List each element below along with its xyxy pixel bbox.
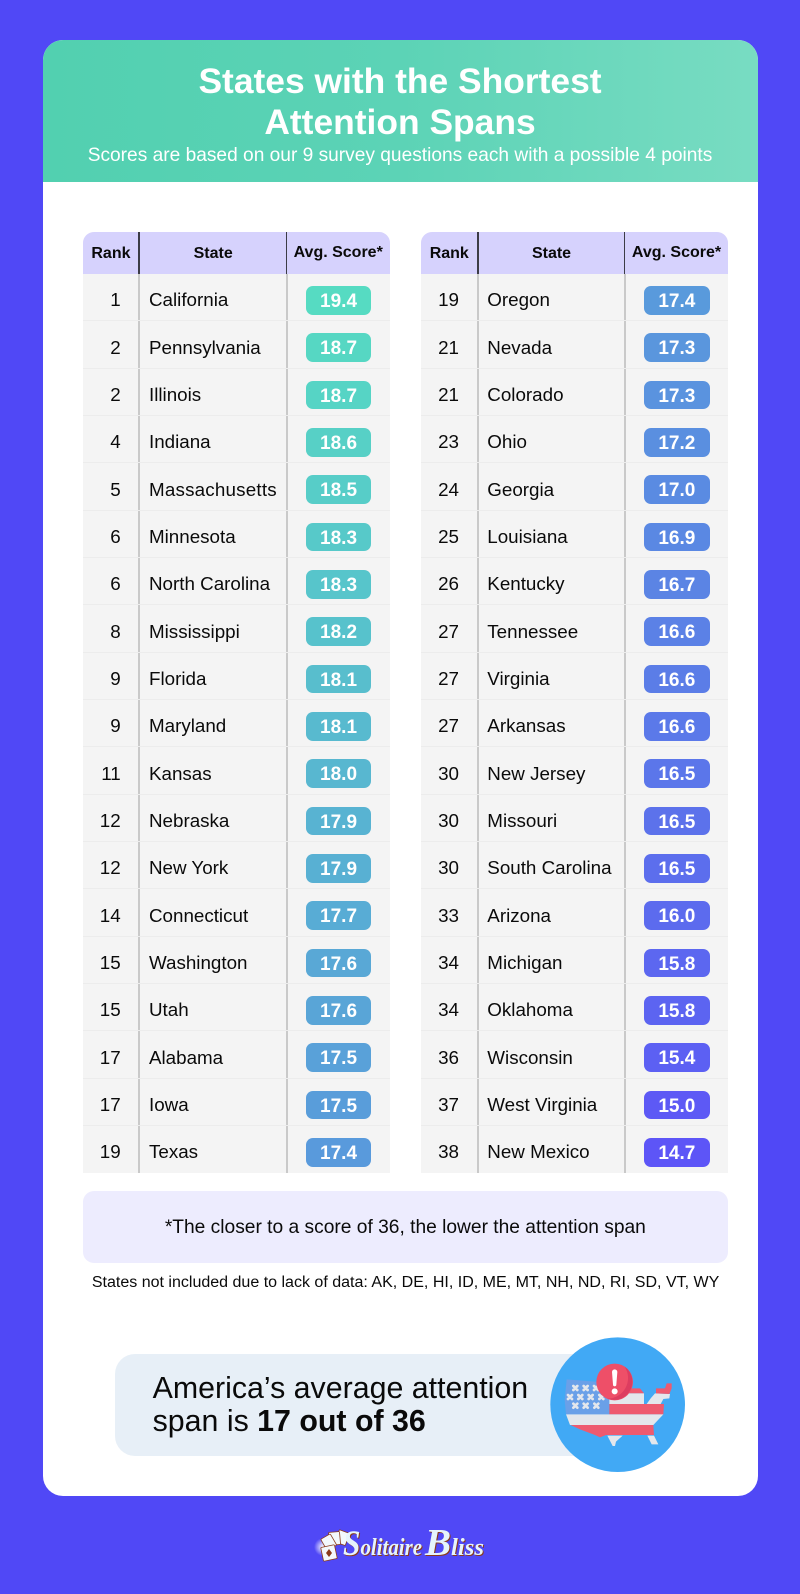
row: Virginia: [421, 653, 728, 700]
row: Kentucky: Kentucky: [487, 573, 565, 594]
logo: Solitaire Bliss: Solitaire: [343, 1523, 422, 1563]
row: Arkansas: [421, 700, 728, 747]
row: Oregon: [421, 274, 728, 321]
logo: Solitaire Bliss: Bliss: [425, 1523, 485, 1565]
row: Kentucky: [421, 558, 728, 605]
row: Wisconsin: [421, 1031, 728, 1079]
row: Nevada: Nevada: [487, 337, 552, 358]
row: Washington: 15: [100, 952, 121, 973]
row: Georgia: 24: [438, 479, 459, 500]
score note callout: [83, 1191, 728, 1263]
row: Connecticut: [83, 889, 390, 937]
row: Illinois: 2: [110, 384, 121, 405]
row: Minnesota: 18.3: [320, 528, 357, 549]
row: Tennessee: 16.6: [658, 622, 695, 643]
title line 1: States with the Shortest: [198, 61, 602, 101]
row: Nevada: 17.3: [658, 338, 695, 359]
row: Texas: 19: [100, 1141, 121, 1162]
row: North Carolina: North Carolina: [149, 573, 270, 594]
header banner: [42, 40, 758, 182]
row: Virginia: 27: [438, 668, 459, 689]
row: Oregon: 19: [438, 289, 459, 310]
row: Arkansas: 16.6: [658, 717, 695, 738]
row: Washington: [83, 937, 390, 984]
row: Louisiana: [421, 511, 728, 558]
row: New Mexico: [438, 1138, 710, 1167]
row: Nebraska: [83, 795, 390, 842]
row: Missouri: [421, 795, 728, 842]
row: Arkansas: Arkansas: [487, 715, 566, 736]
row: Georgia: [421, 463, 728, 511]
row: New Jersey: 16.5: [658, 764, 695, 785]
row: Mississippi: 8: [110, 621, 121, 642]
row: Pennsylvania: 18.7: [320, 338, 357, 359]
row: Virginia: 16.6: [658, 670, 695, 691]
row: Utah: 15: [100, 999, 121, 1020]
row: Texas: [100, 1138, 371, 1167]
row: Iowa: 17: [100, 1094, 121, 1115]
row: New Mexico: 14.7: [658, 1143, 695, 1164]
logo: Solitaire Bliss: Solitaire: [344, 1524, 423, 1564]
row: Maryland: Maryland: [149, 715, 226, 736]
row: Colorado: [421, 369, 728, 416]
row: New Jersey: [421, 747, 728, 795]
row: Nebraska: Nebraska: [149, 810, 229, 831]
row: Texas: 17.4: [320, 1143, 357, 1164]
row: New York: 17.9: [320, 859, 357, 880]
row: Minnesota: 6: [110, 526, 121, 547]
row: Nebraska: 12: [100, 810, 121, 831]
table: ranks 19 to 38: [421, 232, 728, 1173]
row: Florida: 9: [110, 668, 121, 689]
row: Wisconsin: Wisconsin: [487, 1047, 573, 1068]
row: Kansas: Kansas: [149, 763, 212, 784]
logo: Solitaire Bliss: Bliss: [424, 1522, 484, 1564]
row: Arizona: Arizona: [487, 905, 551, 926]
row: West Virginia: 15.0: [658, 1096, 695, 1117]
row: New Jersey: New Jersey: [487, 763, 585, 784]
row: New York: 12: [100, 857, 121, 878]
row: Minnesota: [83, 511, 390, 558]
row: North Carolina: 18.3: [320, 575, 357, 596]
excluded states footnote: States not included due to lack of data: AK, DE, HI, ID, ME, MT, NH, ND, RI, SD, VT, WY: [92, 1273, 719, 1291]
row: Louisiana: 16.9: [658, 528, 695, 549]
table header: State: [532, 245, 571, 262]
national average callout: [115, 1354, 635, 1456]
row: Florida: 18.1: [320, 670, 357, 691]
row: New York: New York: [149, 857, 228, 878]
row: Louisiana: 25: [438, 526, 459, 547]
row: Washington: Washington: [149, 952, 247, 973]
row: Connecticut: 14: [100, 905, 121, 926]
row: Pennsylvania: Pennsylvania: [149, 337, 261, 358]
row: Tennessee: [421, 605, 728, 653]
row: Kansas: 11: [101, 763, 121, 784]
row: Indiana: 18.6: [320, 433, 357, 454]
table header: [83, 232, 390, 274]
row: Iowa: Iowa: [149, 1094, 189, 1115]
row: Nebraska: 17.9: [320, 812, 357, 833]
row: West Virginia: [421, 1079, 728, 1126]
row: Louisiana: Louisiana: [487, 526, 568, 547]
row: Missouri: 30: [438, 810, 459, 831]
row: New Jersey: 30: [438, 763, 459, 784]
row: Indiana: Indiana: [149, 431, 211, 452]
row: Virginia: Virginia: [487, 668, 550, 689]
row: Massachusetts: [83, 463, 390, 511]
table header: [421, 232, 728, 274]
row: Indiana: [83, 416, 390, 463]
row: Wisconsin: 36: [438, 1047, 459, 1068]
row: Washington: 17.6: [320, 954, 357, 975]
row: Kentucky: 16.7: [658, 575, 695, 596]
row: Florida: [83, 653, 390, 700]
row: Arkansas: 27: [438, 715, 459, 736]
row: Michigan: Michigan: [487, 952, 562, 973]
row: Mississippi: 18.2: [320, 622, 357, 643]
row: Massachusetts: 5: [110, 479, 121, 500]
row: West Virginia: West Virginia: [487, 1094, 597, 1115]
row: North Carolina: [83, 558, 390, 605]
row: Georgia: Georgia: [487, 479, 554, 500]
table header: State: [194, 245, 233, 262]
row: Illinois: [83, 369, 390, 416]
row: Massachusetts: Massachusetts: [149, 479, 277, 500]
icon: US flag map with alert: [550, 1337, 685, 1472]
row: Mississippi: [83, 605, 390, 653]
row: Minnesota: Minnesota: [149, 526, 236, 547]
row: South Carolina: 16.5: [658, 859, 695, 880]
row: Pennsylvania: [83, 321, 390, 369]
callout line 1: America’s average attention: [153, 1372, 528, 1405]
row: Indiana: 4: [110, 431, 121, 452]
row: Ohio: [421, 416, 728, 463]
table header: Rank: [91, 245, 130, 262]
table header: Rank: [430, 245, 469, 262]
row: Florida: Florida: [149, 668, 206, 689]
row: South Carolina: 30: [438, 857, 459, 878]
row: Alabama: [83, 1031, 390, 1079]
row: California: 19.4: [320, 291, 357, 312]
row: Iowa: [83, 1079, 390, 1126]
row: Kansas: 18.0: [320, 764, 357, 785]
row: Oklahoma: 34: [438, 999, 459, 1020]
row: Maryland: 9: [110, 715, 121, 736]
row: South Carolina: South Carolina: [487, 857, 612, 878]
row: Arizona: 33: [438, 905, 459, 926]
row: Arizona: 16.0: [658, 906, 695, 927]
score note callout: *The closer to a score of 36, the lower the attention span: [165, 1217, 646, 1238]
row: Texas: Texas: [149, 1141, 198, 1162]
row: Maryland: [83, 700, 390, 747]
row: Oklahoma: [421, 984, 728, 1031]
row: South Carolina: [421, 842, 728, 889]
table header: Avg. Score*: [294, 244, 383, 261]
row: California: 1: [110, 289, 121, 310]
row: Ohio: Ohio: [487, 431, 527, 452]
row: Utah: [83, 984, 390, 1031]
row: North Carolina: 6: [110, 573, 121, 594]
row: Georgia: 17.0: [658, 480, 695, 501]
row: Iowa: 17.5: [320, 1096, 357, 1117]
row: New York: [83, 842, 390, 889]
title line 2: Attention Spans: [264, 102, 536, 142]
row: Maryland: 18.1: [320, 717, 357, 738]
row: Michigan: [421, 937, 728, 984]
row: Nevada: 21: [438, 337, 459, 358]
row: Illinois: 18.7: [320, 386, 357, 407]
row: Illinois: Illinois: [149, 384, 201, 405]
row: Pennsylvania: 2: [110, 337, 121, 358]
row: Oklahoma: 15.8: [658, 1001, 695, 1022]
row: Kentucky: 26: [438, 573, 459, 594]
row: Kansas: [83, 747, 390, 795]
row: Connecticut: 17.7: [320, 906, 357, 927]
row: Tennessee: 27: [438, 621, 459, 642]
row: California: California: [149, 289, 228, 310]
subtitle: Scores are based on our 9 survey questions each with a possible 4 points: [88, 145, 712, 166]
row: Alabama: Alabama: [149, 1047, 223, 1068]
row: Michigan: 34: [438, 952, 459, 973]
row: Alabama: 17.5: [320, 1048, 357, 1069]
row: Colorado: 17.3: [658, 386, 695, 407]
row: Ohio: 17.2: [658, 433, 695, 454]
row: Utah: Utah: [149, 999, 189, 1020]
row: Mississippi: Mississippi: [149, 621, 240, 642]
callout line 2: span is 17 out of 36: [153, 1405, 426, 1438]
row: Oregon: 17.4: [658, 291, 695, 312]
row: Missouri: Missouri: [487, 810, 557, 831]
row: Nevada: [421, 321, 728, 369]
row: Oklahoma: Oklahoma: [487, 999, 573, 1020]
row: Massachusetts: 18.5: [320, 480, 357, 501]
row: Connecticut: Connecticut: [149, 905, 248, 926]
row: New Mexico: New Mexico: [487, 1141, 590, 1162]
row: New Mexico: 38: [438, 1141, 459, 1162]
row: Colorado: 21: [438, 384, 459, 405]
row: Missouri: 16.5: [658, 812, 695, 833]
row: Michigan: 15.8: [658, 954, 695, 975]
table: ranks 1 to 19: [83, 232, 390, 1173]
row: California: [83, 274, 390, 321]
row: Alabama: 17: [100, 1047, 121, 1068]
row: West Virginia: 37: [438, 1094, 459, 1115]
row: Arizona: [421, 889, 728, 937]
row: Utah: 17.6: [320, 1001, 357, 1022]
table header: Avg. Score*: [632, 244, 721, 261]
row: Oregon: Oregon: [487, 289, 550, 310]
row: Ohio: 23: [438, 431, 459, 452]
logo: Solitaire Bliss: [314, 1522, 485, 1565]
row: Tennessee: Tennessee: [487, 621, 578, 642]
row: Wisconsin: 15.4: [658, 1048, 695, 1069]
row: Colorado: Colorado: [487, 384, 564, 405]
